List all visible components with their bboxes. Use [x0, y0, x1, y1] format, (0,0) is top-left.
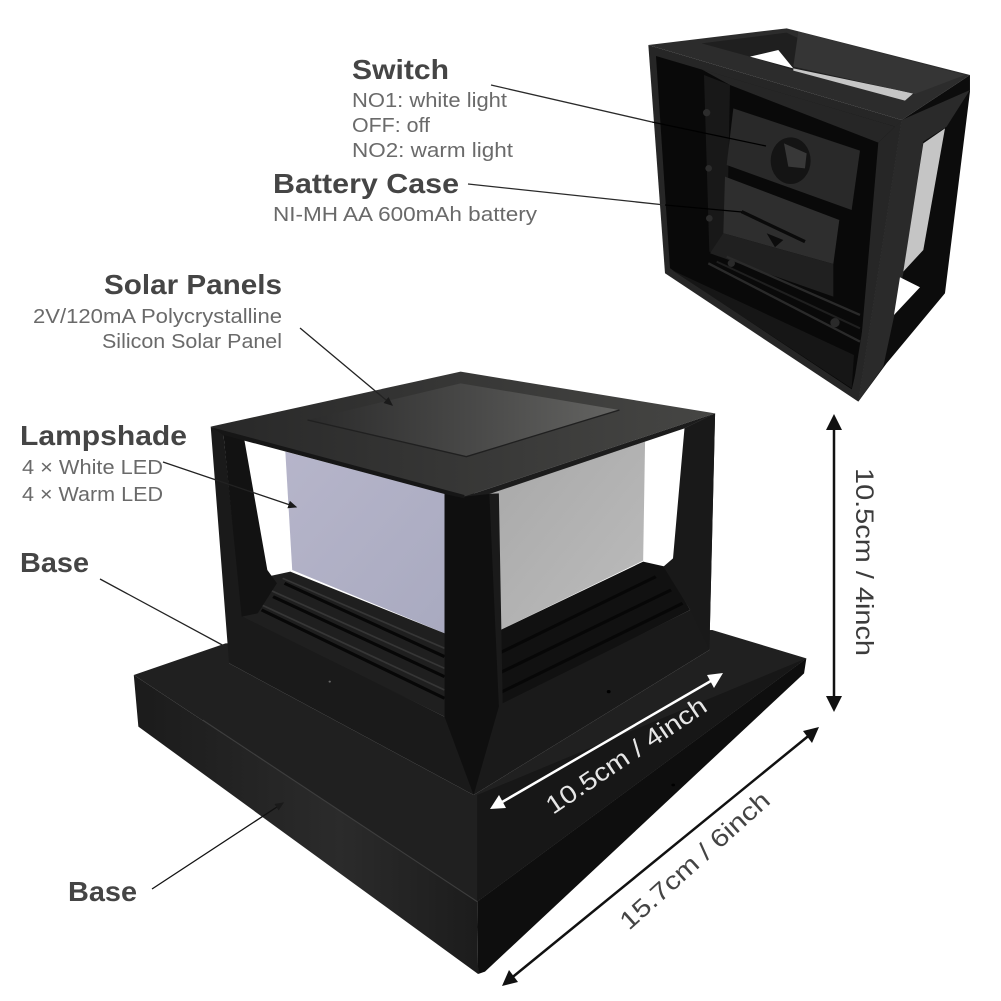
label: solar panels — [33, 269, 282, 353]
label: solar panels: 2V/120mA Polycrystalline — [33, 306, 282, 328]
dimension: base width — [502, 727, 819, 986]
label: battery case: Battery Case — [273, 168, 459, 199]
label: battery case — [273, 168, 537, 226]
leader line: upper base — [100, 579, 226, 647]
dimension: base width: 15.7cm / 6inch — [614, 786, 776, 935]
label: battery case: NI-MH AA 600mAh battery — [273, 204, 537, 226]
leader line: switch — [491, 85, 766, 146]
lamp body — [211, 372, 715, 795]
label: lower base: Base — [68, 876, 137, 907]
label: lampshade — [20, 420, 187, 506]
arrow: lampshade — [163, 462, 296, 507]
dimension: lamp width — [490, 673, 723, 820]
product photo: small lamp, rear open view — [648, 28, 970, 402]
arrow: solar panels — [300, 328, 392, 405]
label: switch — [352, 54, 513, 162]
label: lampshade: 4 × White LED — [22, 457, 163, 479]
label: lampshade: 4 × Warm LED — [22, 484, 163, 506]
base plate — [134, 630, 806, 974]
leader line: battery case — [468, 184, 742, 212]
label: upper base: Base — [20, 547, 89, 578]
label: switch: NO2: warm light — [352, 140, 513, 162]
label: solar panels: Silicon Solar Panel — [102, 331, 282, 353]
label: switch: NO1: white light — [352, 90, 507, 112]
label: lampshade: Lampshade — [20, 420, 187, 451]
dimension: lamp width: 10.5cm / 4inch — [541, 692, 712, 820]
dimension: lamp height: 10.5cm / 4inch — [850, 468, 878, 656]
dimension: lamp height — [826, 414, 878, 712]
product photo: main lamp with base — [134, 372, 806, 974]
label: solar panels: Solar Panels — [104, 269, 282, 300]
label: switch: OFF: off — [352, 115, 430, 137]
label: switch: Switch — [352, 54, 449, 85]
arrow: lower base — [152, 803, 283, 889]
